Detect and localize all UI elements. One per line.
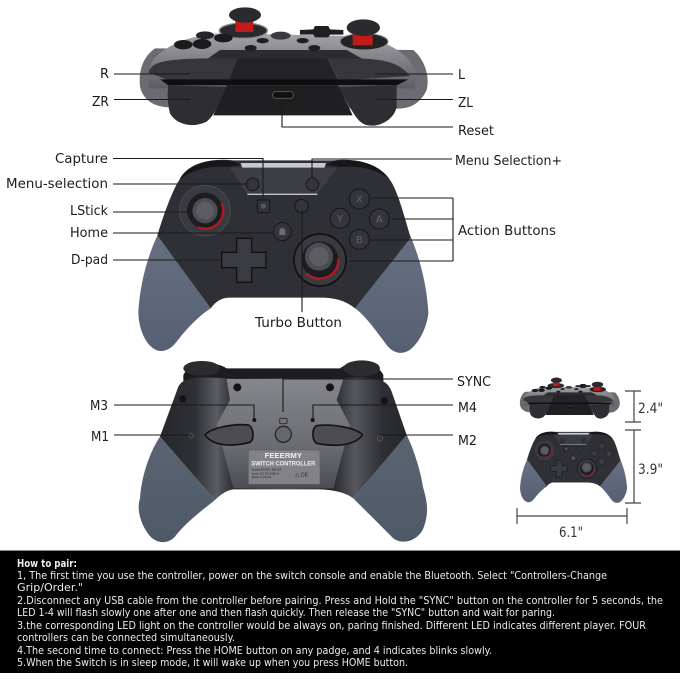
product label text: SWITCH CONTROLLER [251,460,315,467]
product label text: Input: DC 5V 500mA [252,471,279,475]
dimension: width 6.1 inches [517,508,627,541]
USB port [273,92,293,98]
label: ZL: ZL [458,96,474,111]
pairing steps text: 5.When the Switch is in sleep mode, it will wake up when you press HOME button. [17,656,408,669]
label: L: L [458,68,466,83]
label: M3: M3 [90,399,108,414]
controller: front view: X [356,195,363,206]
leader lines: back view [114,379,453,435]
dimension: width 6.1 inches: 6.1" [559,525,583,541]
label: M4: M4 [458,401,477,416]
pairing steps text: 4.The second time to connect: Press the HOME button on any padge, and 4 indicates blinks slowly. [17,644,492,657]
pairing steps text [17,569,663,669]
label: Turbo Button: Turbo Button [254,316,342,331]
product label text: FEEERMY [265,451,302,460]
label: ZR: ZR [92,95,109,110]
controller: front view: B [356,235,363,246]
controller: front view [138,160,428,353]
label: Menu-selection: Menu-selection [6,177,108,192]
pairing steps text: controllers can be connected simultaneously. [17,631,235,644]
label: M2: M2 [458,434,477,449]
left grip [138,236,211,351]
dimension: height 2.4 inches: 2.4" [638,401,663,417]
label: Capture: Capture [55,152,108,167]
product label text [251,451,315,479]
label: LStick: LStick [70,204,108,219]
heading: How to pair: How to pair: [17,557,77,570]
pairing steps text: Grip/Order." [17,581,83,594]
pairing steps text: 1, The first time you use the controller, power on the switch console and enable the Bluetooth. Select "Controllers-Change [17,569,607,582]
label: Menu Selection+: Menu Selection+ [455,154,562,169]
controller: front view: A [376,215,383,226]
leader lines: top view [114,74,453,127]
label: M1: M1 [91,430,109,445]
label: Action Buttons: Action Buttons [458,224,556,239]
product label text: Made in China [252,475,271,479]
product label text: △ CE [295,472,309,478]
controller: back view [139,360,427,542]
product label text: Model:DPGW. SW104 [252,468,282,472]
leader lines: front view [113,158,453,312]
label: R: R [100,67,109,82]
dimension diagram: small controllers [520,378,627,503]
dimension: height 2.4 inches [625,391,663,422]
dimension: height 3.9 inches [625,430,663,503]
label: Home: Home [70,226,108,241]
label: SYNC: SYNC [457,375,491,390]
controller: front view: Y [337,214,344,225]
pairing steps text: LED 1-4 will flash slowly one after one and then flash quickly. Then release the "SYNC" button and wait for paring. [17,606,555,619]
right grip [355,237,428,353]
controller: top view [140,7,428,126]
label: D-pad: D-pad [71,253,108,268]
panel: how to pair [0,550,680,673]
label: Reset: Reset [458,124,494,139]
dimension: height 3.9 inches: 3.9" [638,462,663,478]
